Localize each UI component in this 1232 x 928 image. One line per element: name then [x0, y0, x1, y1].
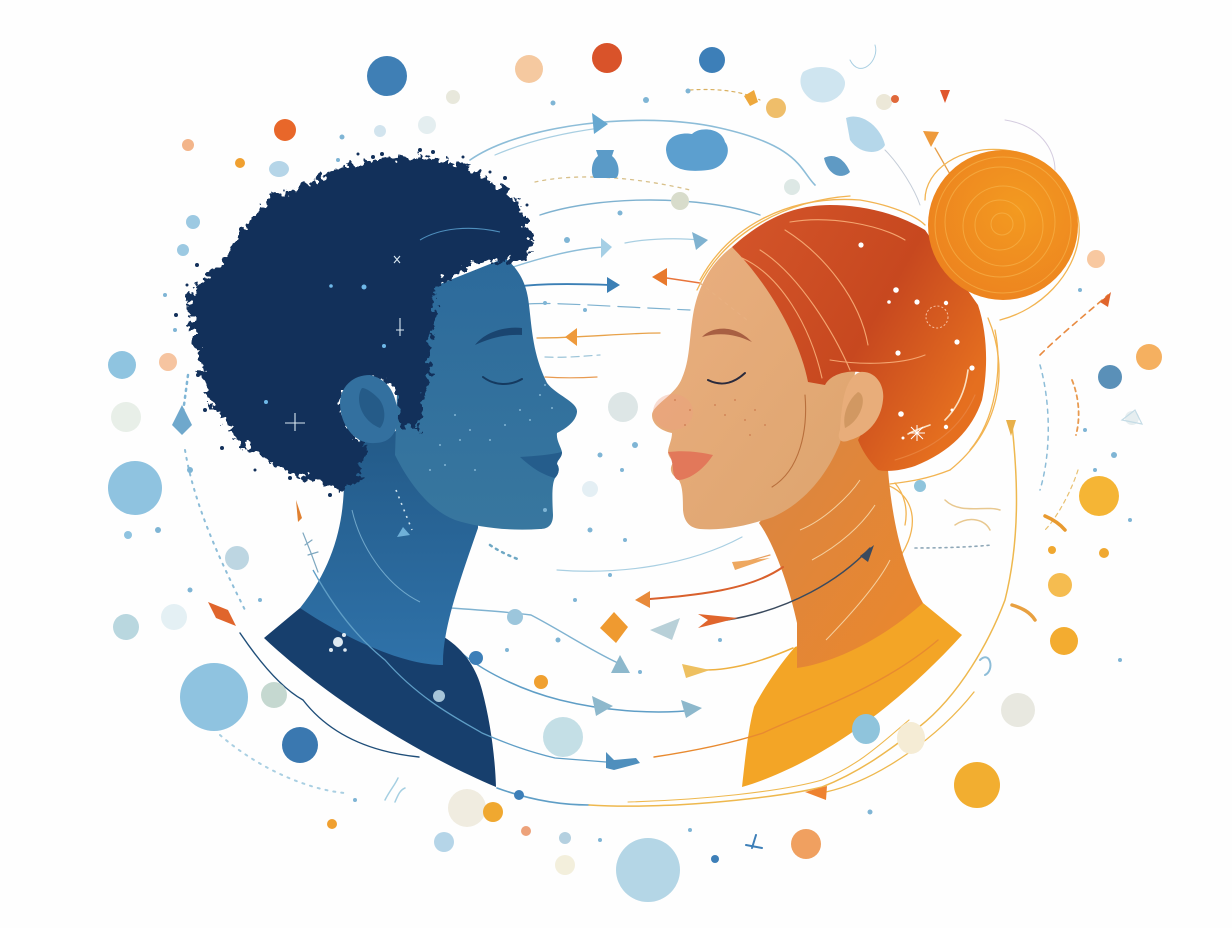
left hair sparkles [285, 228, 500, 431]
left neck marker [397, 527, 410, 537]
right face [652, 247, 860, 529]
right nose blush [653, 394, 693, 430]
right hair pale doodle [926, 306, 948, 328]
left neck dotted line [396, 490, 412, 530]
left closed eye [483, 377, 522, 384]
left shirt dot [433, 690, 445, 702]
left ear [340, 375, 398, 443]
flow lines behind figures [182, 45, 1108, 806]
right freckles [674, 399, 766, 436]
figure: left blue profile [174, 148, 606, 787]
right neck highlights [800, 480, 890, 640]
left freckles [429, 384, 553, 471]
left hair speckles [264, 284, 386, 404]
right hair sparkle [909, 425, 925, 441]
right neck [759, 430, 923, 668]
left brow [475, 328, 522, 345]
right lips [668, 451, 713, 480]
left hair [188, 157, 532, 490]
right inner ear [844, 392, 863, 428]
particles: tiny dots [155, 88, 1132, 842]
left shirt crossing line [313, 570, 606, 762]
right hair outer strands [697, 149, 1079, 570]
left shirt [264, 608, 496, 787]
right shirt [742, 603, 962, 787]
particles: circles around the figures [108, 43, 1162, 902]
right hair strands [742, 220, 975, 487]
left inner ear [359, 388, 384, 428]
right bun swirl [935, 157, 1071, 293]
right closed eye [708, 373, 745, 384]
particles: cloud, jar and diamond shapes [592, 129, 728, 643]
left face [395, 258, 577, 530]
left neck line [352, 510, 420, 602]
right brow [702, 329, 752, 342]
right hair white dots [858, 242, 975, 440]
figure: right orange profile [652, 149, 1079, 787]
right hair bun [928, 150, 1078, 300]
left neck [300, 430, 478, 665]
left lips [520, 452, 562, 478]
flow lines over figures [638, 283, 938, 757]
arrowheads [172, 90, 1111, 800]
left shirt sparkle [329, 633, 347, 652]
particles: pale organic doodles [159, 67, 1142, 848]
right ear [839, 372, 883, 442]
right hair [732, 205, 986, 471]
left hair loose specks [174, 148, 528, 497]
